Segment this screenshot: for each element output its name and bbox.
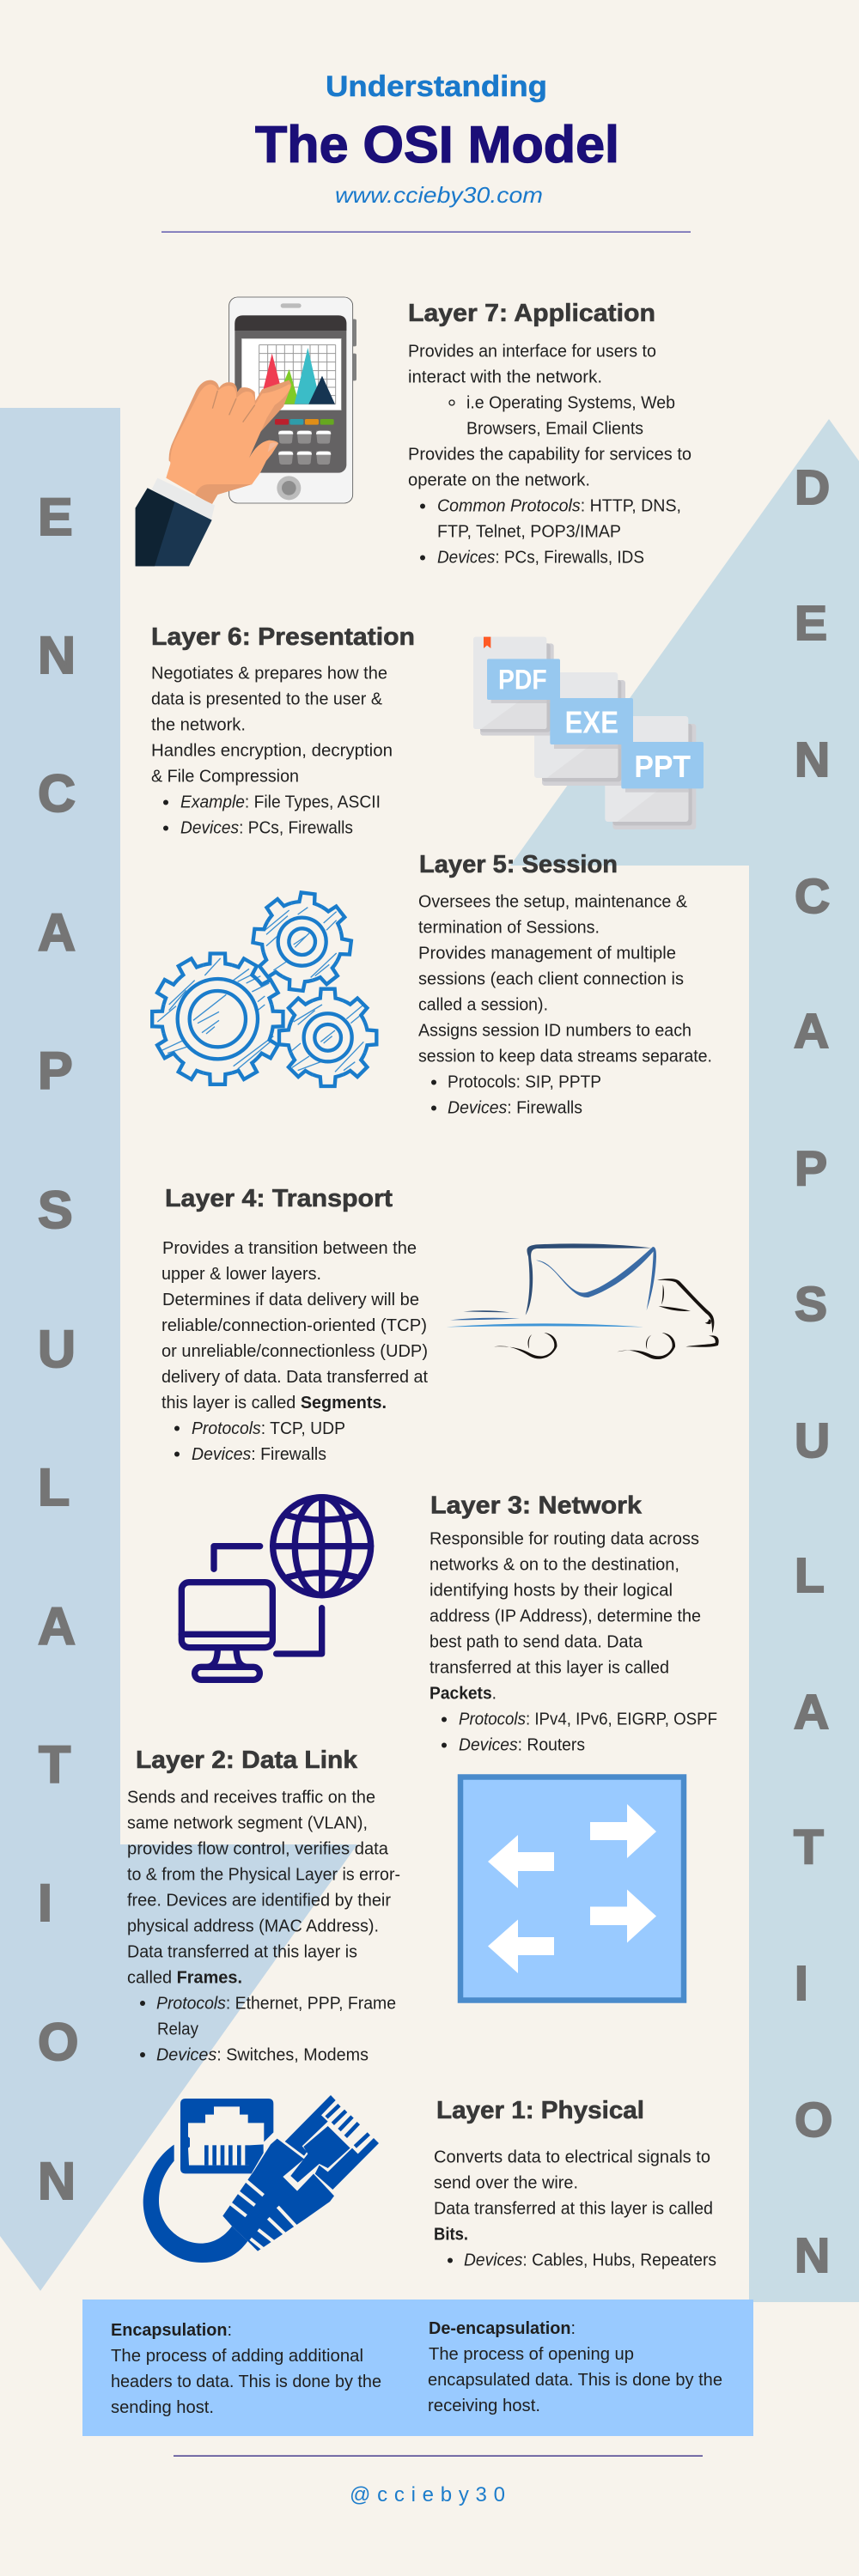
text: layer 6: data is presented to the user & bbox=[151, 690, 382, 709]
text: layer 6: the network. bbox=[151, 715, 246, 735]
text: layer 1: Devices: Cables, Hubs, Repeaters bbox=[464, 2250, 716, 2270]
text: de-encapsulation definition: receiving host. bbox=[428, 2396, 540, 2415]
encapsulation vertical letters: E bbox=[38, 488, 73, 546]
text: layer 6: Example: File Types, ASCII bbox=[180, 793, 381, 812]
text: layer 4: this layer is called Segments. bbox=[161, 1393, 387, 1413]
text: layer 3: Packets. bbox=[430, 1684, 497, 1704]
text: layer 3: identifying hosts by their logical bbox=[430, 1581, 673, 1601]
text: encapsulation definition: headers to data. This is done by the bbox=[111, 2372, 381, 2391]
text: layer 6 bbox=[151, 664, 393, 838]
text: layer 7 bbox=[408, 342, 691, 568]
text: layer 7: Browsers, Email Clients bbox=[466, 419, 643, 439]
text: layer 2: free. Devices are identified by their bbox=[127, 1890, 391, 1910]
footer handle: @ccieby30 bbox=[350, 2483, 505, 2506]
text: layer 5: termination of Sessions. bbox=[418, 918, 600, 938]
subtitle: Understanding bbox=[326, 70, 547, 103]
encapsulation vertical letters: T bbox=[39, 1735, 70, 1794]
text: layer 4 bbox=[161, 1238, 428, 1464]
de-encapsulation vertical letters: O bbox=[795, 2093, 832, 2148]
de-encapsulation vertical letters: A bbox=[794, 1685, 829, 1740]
heading: layer 4: Layer 4: Transport bbox=[165, 1185, 393, 1212]
heading: layer 5: Layer 5: Session bbox=[419, 851, 618, 878]
de-encapsulation vertical letters: C bbox=[795, 869, 830, 924]
text: layer 1 bbox=[434, 2147, 716, 2270]
encapsulation vertical letters: U bbox=[38, 1320, 76, 1378]
text: layer 7: FTP, Telnet, POP3/IMAP bbox=[437, 522, 621, 542]
text: layer 5: Provides management of multiple bbox=[418, 944, 676, 963]
text: layer 4: Protocols: TCP, UDP bbox=[192, 1419, 345, 1438]
text: layer 3: Responsible for routing data across bbox=[430, 1529, 699, 1549]
de-encapsulation vertical letters: N bbox=[795, 2228, 830, 2283]
encapsulation vertical letters: L bbox=[38, 1458, 70, 1516]
de-encapsulation vertical letters: T bbox=[794, 1820, 824, 1874]
de-encapsulation vertical letters bbox=[794, 460, 832, 2283]
de-encapsulation vertical letters: N bbox=[795, 732, 830, 787]
panel: layer 3 bbox=[181, 1492, 717, 1755]
icon: PDF EXE PPT documents bbox=[473, 637, 704, 829]
icon: gears bbox=[152, 888, 376, 1086]
encapsulation vertical letters: I bbox=[38, 1874, 52, 1932]
text: layer 6: Handles encryption, decryption bbox=[151, 741, 393, 761]
text: encapsulation definition: Encapsulation: bbox=[111, 2320, 232, 2340]
text: layer 2: called Frames. bbox=[127, 1967, 242, 1987]
text: layer 5: session to keep data streams separate. bbox=[418, 1047, 712, 1066]
text: layer 2: provides flow control, verifies data bbox=[127, 1838, 389, 1858]
text: layer 5: Protocols: SIP, PPTP bbox=[448, 1072, 601, 1092]
text: layer 5: sessions (each client connection is bbox=[418, 969, 684, 989]
panel: layer 5 bbox=[152, 851, 712, 1118]
text: layer 3: address (IP Address), determine the bbox=[430, 1607, 701, 1626]
text: layer 3: networks & on to the destination, bbox=[430, 1555, 679, 1575]
text: encapsulation definition: sending host. bbox=[111, 2397, 214, 2417]
text: layer 5: Assigns session ID numbers to each bbox=[418, 1021, 691, 1041]
text: layer 1: Bits. bbox=[434, 2224, 468, 2245]
text: layer 5: Oversees the setup, maintenance & bbox=[418, 892, 687, 912]
text: layer 5: called a session). bbox=[418, 995, 548, 1015]
de-encapsulation vertical letters: P bbox=[795, 1141, 827, 1196]
text: layer 6: Devices: PCs, Firewalls bbox=[180, 818, 353, 838]
text: layer 6: & File Compression bbox=[151, 767, 299, 787]
text: layer 2: Devices: Switches, Modems bbox=[156, 2044, 369, 2064]
text: layer 4: upper & lower layers. bbox=[161, 1264, 321, 1284]
text: layer 6: Negotiates & prepares how the bbox=[151, 664, 387, 683]
text: layer 2: physical address (MAC Address). bbox=[127, 1916, 379, 1935]
text: layer 2: same network segment (VLAN), bbox=[127, 1813, 368, 1832]
de-encapsulation vertical letters: L bbox=[795, 1548, 825, 1603]
encapsulation vertical letters: C bbox=[38, 764, 76, 823]
text: layer 4: delivery of data. Data transferred at bbox=[161, 1367, 428, 1387]
text: layer 5 bbox=[418, 892, 712, 1118]
icon: phone and hand bbox=[136, 297, 356, 566]
text: de-encapsulation definition: The process of opening up bbox=[429, 2344, 634, 2364]
encapsulation arrow band bbox=[0, 408, 357, 2291]
de-encapsulation arrow band bbox=[510, 419, 859, 2302]
text: layer 7: interact with the network. bbox=[408, 368, 602, 387]
text: layer 4: reliable/connection-oriented (TCP) bbox=[161, 1315, 427, 1335]
website: www.ccieby30.com bbox=[335, 182, 543, 208]
heading: layer 7: Layer 7: Application bbox=[408, 300, 655, 327]
icon: ethernet cable and jack bbox=[143, 2095, 379, 2263]
text: encapsulation definition bbox=[111, 2320, 381, 2417]
panel: layer 2 bbox=[127, 1747, 684, 2064]
text: layer 4: Determines if data delivery will be bbox=[162, 1290, 419, 1309]
de-encapsulation vertical letters: S bbox=[795, 1277, 827, 1332]
encapsulation vertical letters: O bbox=[38, 2013, 78, 2071]
text: layer 7: i.e Operating Systems, Web bbox=[466, 393, 675, 413]
text: layer 2: to & from the Physical Layer is error- bbox=[127, 1864, 400, 1884]
de-encapsulation vertical letters: A bbox=[794, 1004, 829, 1059]
icon: monitor and globe bbox=[181, 1498, 371, 1680]
icon: PDF EXE PPT documents: PDF bbox=[498, 665, 547, 696]
text: encapsulation definition: The process of adding additional bbox=[111, 2346, 363, 2366]
text: layer 2 bbox=[127, 1787, 400, 2064]
text: layer 2: Sends and receives traffic on the bbox=[127, 1787, 375, 1807]
text: layer 7: Provides the capability for services to bbox=[408, 445, 691, 465]
text: layer 3: best path to send data. Data bbox=[430, 1632, 643, 1652]
heading: layer 1: Layer 1: Physical bbox=[436, 2097, 644, 2124]
title: The OSI Model bbox=[255, 116, 619, 173]
text: layer 2: Data transferred at this layer is bbox=[127, 1941, 357, 1961]
text: layer 5: Devices: Firewalls bbox=[448, 1098, 582, 1118]
text: layer 4: Provides a transition between the bbox=[162, 1238, 417, 1258]
text: layer 3 bbox=[430, 1529, 717, 1755]
text: layer 1: send over the wire. bbox=[434, 2172, 578, 2193]
panel: layer 4 bbox=[161, 1185, 719, 1464]
panel: layer 6 bbox=[151, 623, 704, 838]
text: layer 4: Devices: Firewalls bbox=[192, 1444, 326, 1464]
heading: layer 3: Layer 3: Network bbox=[430, 1492, 643, 1520]
text: layer 4: or unreliable/connectionless (UDP) bbox=[161, 1341, 428, 1361]
heading: layer 6: Layer 6: Presentation bbox=[151, 623, 415, 651]
text: layer 7: Common Protocols: HTTP, DNS, bbox=[437, 496, 681, 516]
text: de-encapsulation definition bbox=[428, 2318, 722, 2415]
encapsulation vertical letters: N bbox=[38, 626, 76, 684]
text: layer 1: Data transferred at this layer is called bbox=[434, 2198, 713, 2219]
text: layer 3: transferred at this layer is called bbox=[430, 1658, 669, 1678]
text: layer 2: Relay bbox=[157, 2019, 199, 2038]
icon: PDF EXE PPT documents: EXE bbox=[565, 704, 618, 739]
heading: layer 2: Layer 2: Data Link bbox=[136, 1747, 358, 1774]
panel: layer 1 bbox=[143, 2095, 716, 2270]
de-encapsulation vertical letters: E bbox=[795, 596, 827, 651]
encapsulation vertical letters: N bbox=[38, 2152, 76, 2210]
de-encapsulation vertical letters: U bbox=[795, 1413, 830, 1468]
encapsulation vertical letters bbox=[38, 488, 78, 2210]
encapsulation vertical letters: P bbox=[38, 1042, 73, 1100]
encapsulation vertical letters: A bbox=[38, 903, 76, 962]
icon: PDF EXE PPT documents: PPT bbox=[634, 749, 691, 784]
text: de-encapsulation definition: De-encapsulation: bbox=[429, 2318, 576, 2338]
text: layer 2: Protocols: Ethernet, PPP, Frame bbox=[156, 1993, 396, 2013]
panel: layer 7 bbox=[136, 297, 691, 568]
text: layer 1: Converts data to electrical signals to bbox=[434, 2147, 710, 2167]
text: de-encapsulation definition: encapsulated data. This is done by the bbox=[428, 2370, 722, 2390]
text: layer 7: operate on the network. bbox=[408, 471, 590, 490]
encapsulation vertical letters: A bbox=[38, 1597, 76, 1656]
text: layer 7: Provides an interface for users to bbox=[408, 342, 656, 361]
panel: definitions bbox=[82, 2300, 753, 2436]
text: layer 3: Devices: Routers bbox=[459, 1735, 585, 1755]
de-encapsulation vertical letters: D bbox=[795, 460, 830, 515]
de-encapsulation vertical letters: I bbox=[795, 1956, 808, 2011]
icon: envelope delivery truck bbox=[446, 1243, 719, 1359]
encapsulation vertical letters: S bbox=[38, 1181, 73, 1239]
icon: switch with arrows bbox=[460, 1777, 684, 2001]
header bbox=[161, 70, 691, 233]
text: layer 3: Protocols: IPv4, IPv6, EIGRP, OSPF bbox=[459, 1710, 717, 1729]
text: layer 7: Devices: PCs, Firewalls, IDS bbox=[437, 548, 644, 568]
